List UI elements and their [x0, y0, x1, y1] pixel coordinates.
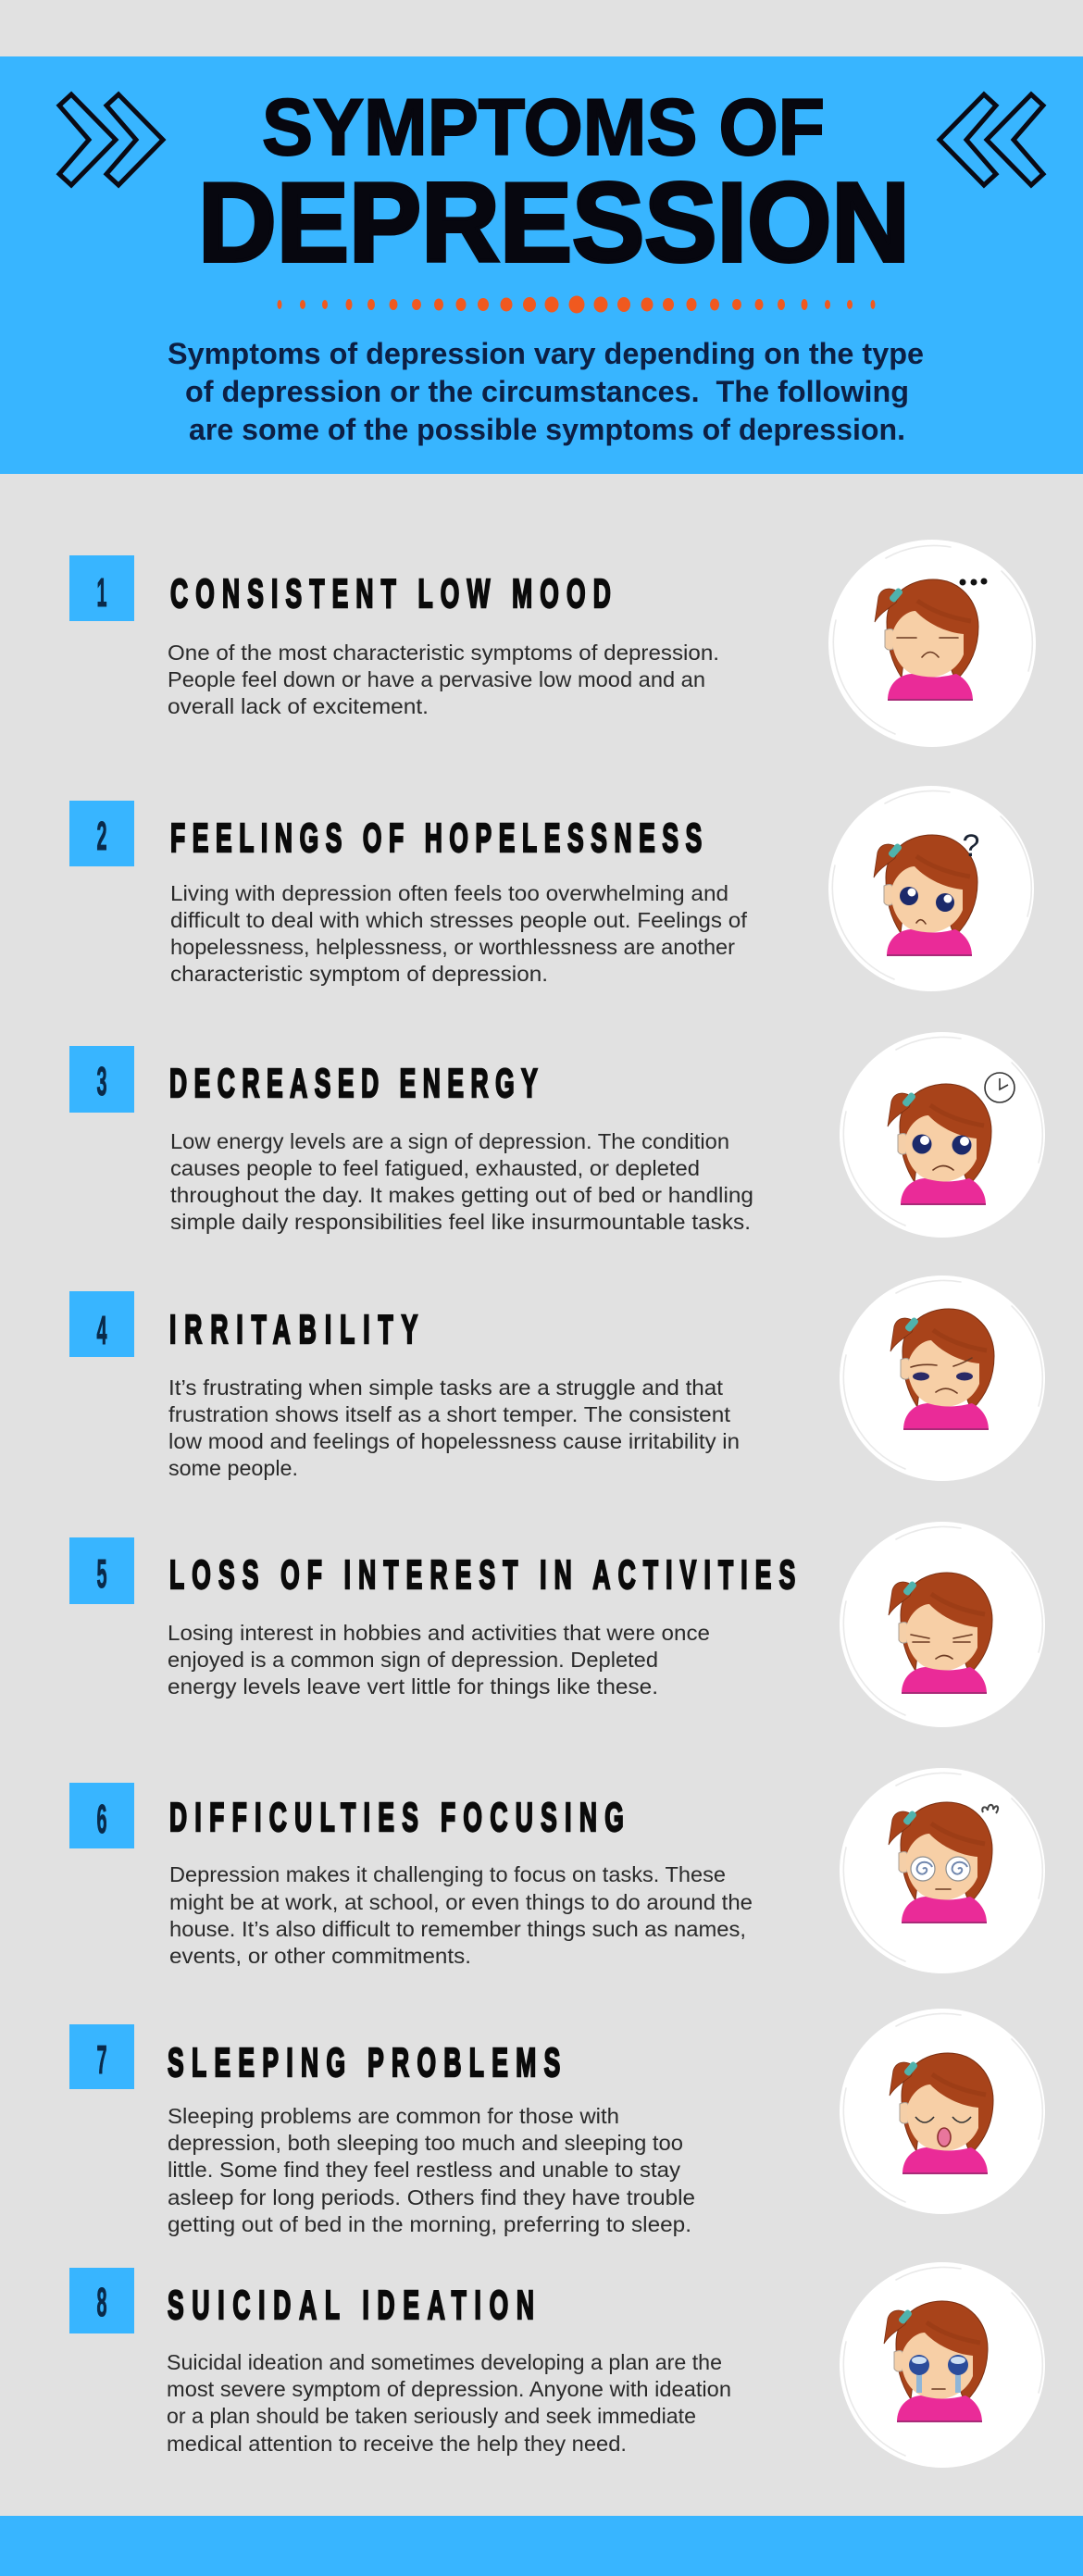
panel: symptom 6	[69, 1768, 1045, 1973]
illustration 4: irritated girl	[840, 1276, 1045, 1481]
number badge 4: 4	[96, 1308, 107, 1353]
body text 4: low mood and feelings of hopelessness cause irritability in	[168, 1429, 740, 1453]
number badge 7: 7	[96, 2037, 107, 2083]
panel: symptom 1	[69, 540, 1036, 747]
panel: symptom 3	[69, 1032, 1045, 1238]
intro text	[168, 337, 924, 446]
panel: symptom 2	[69, 786, 1034, 991]
panel: symptom 7	[69, 2009, 1045, 2236]
body text 8	[167, 2350, 731, 2456]
heading 2: FEELINGS OF HOPELESSNESS	[170, 815, 702, 861]
number badge 1: 1	[96, 570, 107, 616]
heading 1: CONSISTENT LOW MOOD	[170, 570, 611, 616]
number badge 5: 5	[96, 1551, 107, 1597]
body text 1	[168, 641, 719, 718]
body text 2: hopelessness, helplessness, or worthlessness are another	[170, 935, 735, 959]
body text 6: events, or other commitments.	[169, 1944, 471, 1968]
number badge 2	[69, 801, 134, 866]
intro text: are some of the possible symptoms of depression.	[189, 413, 905, 446]
panel: header banner	[0, 56, 1083, 474]
body text 1: One of the most characteristic symptoms of depression.	[168, 641, 719, 665]
icon: left double chevron	[59, 94, 163, 185]
body text 7: getting out of bed in the morning, preferring to sleep.	[168, 2212, 691, 2236]
illustration 5: girl with flat eyes	[840, 1522, 1045, 1727]
illustration 2: girl with question mark: ?	[963, 828, 979, 864]
body text 8: or a plan should be taken seriously and seek immediate	[167, 2404, 696, 2428]
body text 3: causes people to feel fatigued, exhausted, or depleted	[170, 1156, 700, 1180]
body text 6: might be at work, at school, or even things to do around the	[169, 1890, 753, 1914]
body text 8: Suicidal ideation and sometimes developing a plan are the	[167, 2350, 722, 2374]
illustration 2: girl with question mark	[828, 786, 1034, 991]
number badge 4	[69, 1291, 134, 1357]
number badge 8	[69, 2268, 134, 2333]
body text 6: house. It’s also difficult to remember things such as names,	[169, 1917, 746, 1941]
illustration 3: girl with clock	[840, 1032, 1045, 1238]
number badge 6	[69, 1783, 134, 1848]
title line 2: DEPRESSION	[198, 159, 910, 285]
number badge 3	[69, 1046, 134, 1113]
number badge 3: 3	[96, 1059, 107, 1104]
intro text: of depression or the circumstances. The following	[185, 375, 909, 408]
number badge 1	[69, 555, 134, 621]
panel: symptom 8	[69, 2262, 1045, 2468]
body text 1: overall lack of excitement.	[168, 694, 429, 718]
number badge 2: 2	[96, 814, 107, 859]
heading 3: DECREASED ENERGY	[169, 1060, 538, 1106]
number badge 8: 8	[96, 2280, 107, 2325]
body text 4	[168, 1375, 740, 1480]
heading 4: IRRITABILITY	[169, 1306, 417, 1352]
body text 2	[170, 881, 747, 986]
body text 4: It’s frustrating when simple tasks are a struggle and that	[168, 1375, 723, 1400]
heading 7: SLEEPING PROBLEMS	[168, 2039, 560, 2085]
footer band	[0, 2516, 1083, 2576]
body text 4: frustration shows itself as a short temper. The consistent	[168, 1402, 730, 1426]
panel: symptom 5	[69, 1522, 1045, 1727]
body text 2: difficult to deal with which stresses people out. Feelings of	[170, 908, 747, 932]
body text 5: Losing interest in hobbies and activities that were once	[168, 1621, 710, 1645]
number badge 7	[69, 2024, 134, 2089]
dotted divider	[278, 296, 876, 313]
body text 3	[170, 1129, 753, 1234]
body text 3: throughout the day. It makes getting out of bed or handling	[170, 1183, 753, 1207]
heading 8: SUICIDAL IDEATION	[168, 2282, 534, 2328]
body text 6	[169, 1862, 753, 1968]
body text 7: little. Some find they feel restless and unable to stay	[168, 2158, 680, 2182]
illustration 8: crying girl	[840, 2262, 1045, 2468]
body text 6: Depression makes it challenging to focus on tasks. These	[169, 1862, 726, 1886]
body text 7: asleep for long periods. Others find they have trouble	[168, 2185, 695, 2209]
illustration 1: girl with closed eyes	[828, 540, 1036, 747]
body text 1: People feel down or have a pervasive low mood and an	[168, 667, 705, 691]
body text 7: Sleeping problems are common for those with	[168, 2104, 619, 2128]
body text 7	[168, 2104, 695, 2236]
body text 2: Living with depression often feels too overwhelming and	[170, 881, 728, 905]
illustration 6: girl with spiral eyes	[840, 1768, 1045, 1973]
body text 5: enjoyed is a common sign of depression. Depleted	[168, 1648, 658, 1672]
body text 3: Low energy levels are a sign of depression. The condition	[170, 1129, 729, 1153]
body text 7: depression, both sleeping too much and sleeping too	[168, 2131, 683, 2155]
illustration 7: yawning girl	[840, 2009, 1045, 2214]
intro text: Symptoms of depression vary depending on the type	[168, 337, 924, 370]
body text 2: characteristic symptom of depression.	[170, 962, 548, 986]
body text 5	[168, 1621, 710, 1699]
heading 6: DIFFICULTIES FOCUSING	[169, 1794, 624, 1840]
number badge 5	[69, 1537, 134, 1604]
title line 1: SYMPTOMS OF	[262, 83, 825, 172]
body text 5: energy levels leave vert little for things like these.	[168, 1674, 658, 1699]
heading 5: LOSS OF INTEREST IN ACTIVITIES	[169, 1551, 795, 1598]
number badge 6: 6	[96, 1797, 107, 1842]
body text 8: medical attention to receive the help they need.	[167, 2432, 627, 2456]
body text 4: some people.	[168, 1456, 298, 1480]
icon: right double chevron	[940, 94, 1043, 185]
panel: symptom 4	[69, 1276, 1045, 1481]
body text 3: simple daily responsibilities feel like insurmountable tasks.	[170, 1210, 751, 1234]
body text 8: most severe symptom of depression. Anyone with ideation	[167, 2377, 731, 2401]
